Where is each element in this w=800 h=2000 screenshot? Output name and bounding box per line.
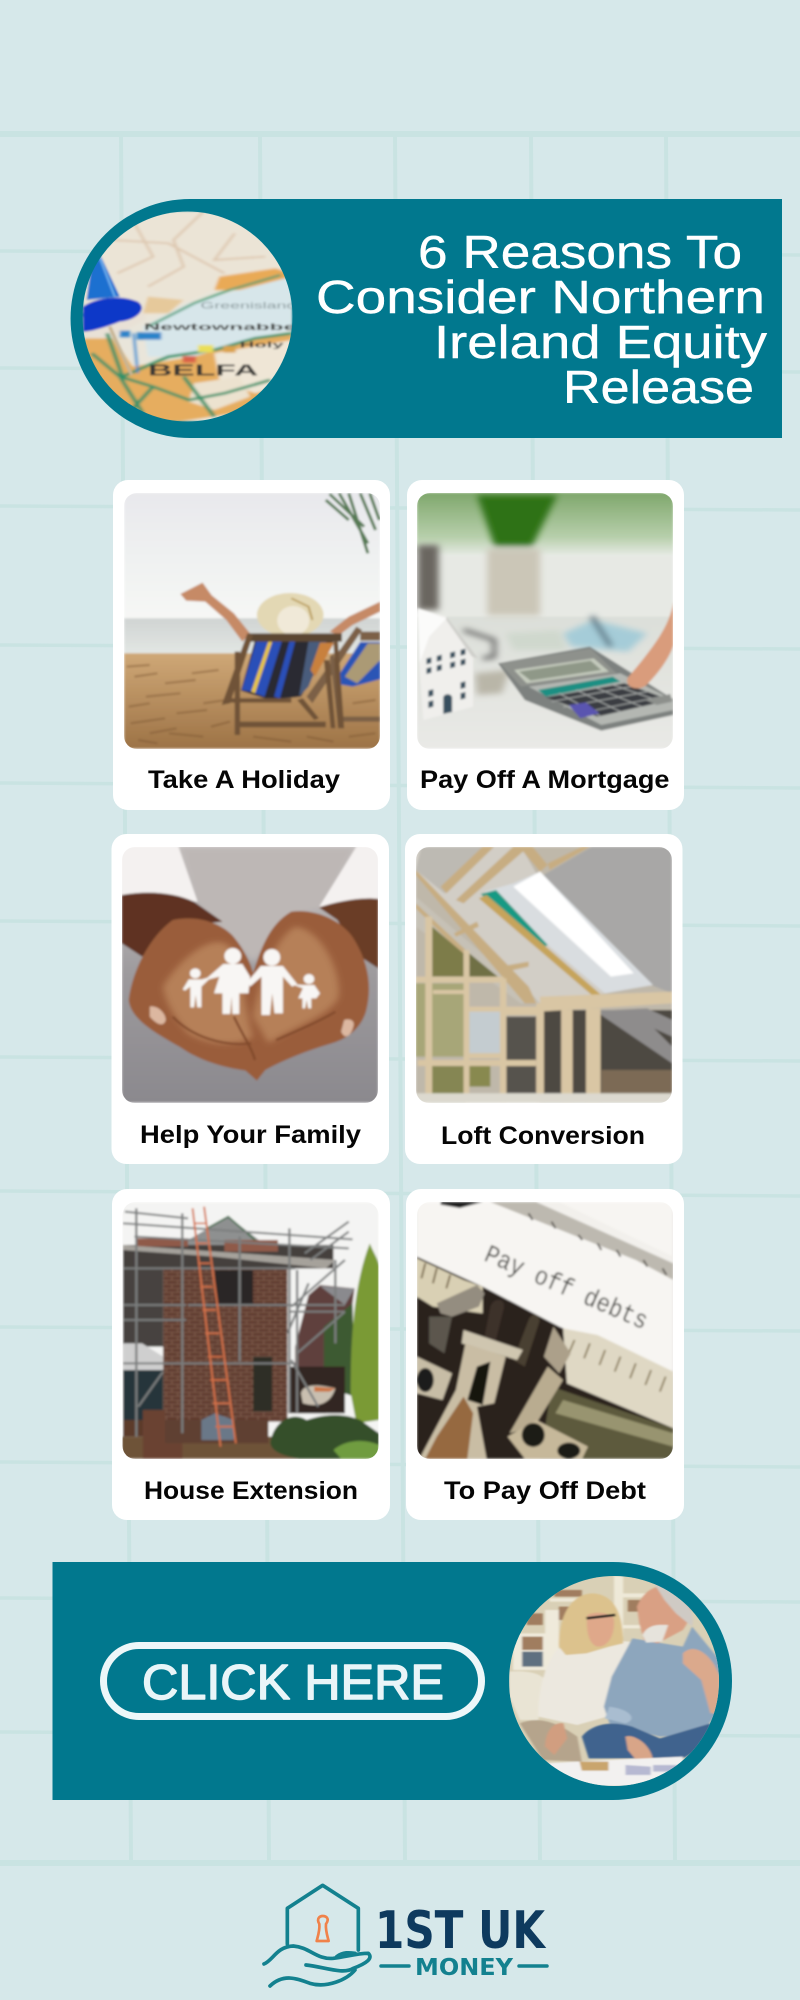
banner background [71, 199, 782, 438]
second deckchair [333, 642, 380, 687]
map labels [144, 301, 292, 377]
card: House Extension [112, 1189, 390, 1520]
card: Help Your Family [112, 834, 389, 1164]
big grey panel [539, 847, 672, 993]
caption: Take A Holiday [148, 766, 340, 794]
photo: older couple reviewing paperwork [509, 1576, 720, 1786]
photo: typewriter typing pay off debts [417, 1202, 673, 1459]
studs [416, 917, 672, 1103]
deckchair [241, 640, 334, 700]
heading [316, 226, 767, 413]
rusty metal arm [420, 1343, 506, 1459]
woman [538, 1641, 630, 1725]
caption: House Extension [144, 1477, 358, 1505]
photo: cupped hands holding paper family [122, 847, 378, 1103]
palm leaf [326, 493, 379, 553]
bush [270, 1415, 379, 1459]
card: Take A Holiday [113, 480, 390, 810]
papers [545, 1757, 683, 1786]
photo: map of Belfast with pin [83, 211, 309, 422]
man's head [637, 1585, 692, 1643]
logo: 1st UK Money [264, 1885, 547, 1986]
paper [417, 1202, 673, 1377]
man's shirt [604, 1627, 720, 1737]
sloped ceiling panels [416, 847, 605, 1003]
hedge [351, 1243, 379, 1423]
ladder [193, 1207, 236, 1447]
photo: woman on a beach deckchair [124, 493, 380, 749]
caption: Loft Conversion [441, 1122, 645, 1150]
typed words: Pay off debts [480, 1240, 652, 1337]
calculator [498, 647, 673, 731]
jeans [582, 1723, 710, 1758]
caption: To Pay Off Debt [444, 1477, 647, 1505]
icon: house with keyhole held in a hand [264, 1885, 370, 1986]
map labels: Newtownabbey [144, 322, 309, 332]
model house [418, 608, 473, 720]
scaffolding [123, 1208, 353, 1437]
call to action banner [52, 1562, 732, 1800]
caption: Help Your Family [140, 1121, 361, 1149]
lower dark right side [540, 1010, 672, 1103]
roof window [485, 872, 653, 993]
heading: Release [563, 361, 754, 413]
gable and neighbour house [186, 1216, 259, 1247]
brick wall [163, 1268, 288, 1422]
wordmark: 1ST UK [375, 1901, 546, 1961]
photo: brick house with scaffolding [122, 1202, 379, 1459]
card: Loft Conversion [405, 834, 682, 1164]
insulation wall [432, 927, 464, 977]
banner background [52, 1562, 732, 1800]
map labels: Holy [240, 341, 284, 349]
click here button: CLICK HERE [142, 1656, 444, 1710]
heading: Ireland Equity [434, 316, 767, 368]
paper family [183, 948, 320, 1015]
heading: 6 Reasons To [418, 226, 742, 278]
finger [627, 602, 673, 688]
click here button [104, 1646, 482, 1716]
card: Pay Off A Mortgage [407, 480, 684, 810]
cupped hands [129, 911, 369, 1081]
type bars [540, 1387, 673, 1459]
timbers [416, 847, 590, 1003]
card: To Pay Off Debt [406, 1189, 684, 1520]
bookcase [513, 1610, 559, 1717]
photo: loft under construction [416, 847, 672, 1103]
photo: model house and calculator [417, 493, 673, 749]
forearms [122, 893, 222, 957]
sofa [509, 1671, 545, 1720]
map pin [83, 253, 142, 375]
ground [122, 1437, 379, 1459]
tagline: MONEY [415, 1955, 513, 1981]
header banner [71, 199, 782, 438]
ruler strip [490, 1202, 673, 1280]
map labels: BELFA [148, 361, 258, 379]
lower ruled paper guide [563, 1328, 673, 1428]
heading: Consider Northern [316, 271, 765, 323]
arms [180, 583, 250, 642]
map labels: Greenisland [201, 301, 296, 311]
caption: Pay Off A Mortgage [420, 766, 670, 794]
hat [257, 593, 323, 637]
